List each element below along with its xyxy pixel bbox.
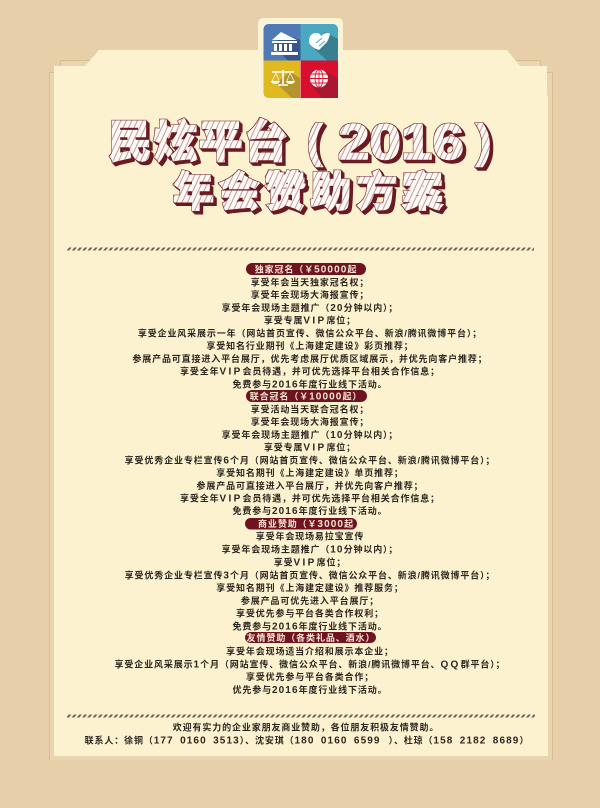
benefits list: 联合冠名: 免费参与2016年度行业线下活动。 (233, 505, 387, 517)
benefits list: 独家冠名: 享受年会当天独家冠名权； (251, 276, 369, 288)
section: 联合冠名 (125, 390, 495, 517)
benefits list: 商业赞助: 参展产品可优先进入平台展厅； (241, 595, 379, 607)
benefits list: 友情赞助: 享受年会现场适当介绍和展示本企业； (226, 646, 394, 658)
paper panel (54, 50, 548, 756)
benefits list: 商业赞助 (125, 530, 495, 632)
benefits list: 独家冠名: 享受企业风采展示一年（网站首页宣传、微信公众平台、新浪/腾讯微博平台）； (138, 328, 482, 340)
badge: 友情赞助: 友情赞助（各类礼品、酒水） (247, 632, 375, 643)
title: 民炫平台（2016）: ) (476, 115, 491, 167)
benefits list: 商业赞助: 享受优秀企业专栏宣传3个月（网站首页宣传、微信公众平台、新浪/腾讯微博平台）； (125, 570, 495, 582)
icon tile: handshake heart (300, 24, 338, 60)
benefits list: 商业赞助: 享受年会现场主题推广（10分钟以内）； (222, 544, 398, 556)
benefits list: 联合冠名: 享受全年VIP会员待遇，并可优先选择平台相关合作信息； (180, 492, 440, 504)
footer: contact information: 欢迎有实力的企业家朋友商业赞助，各位朋友积极友情赞助。 (173, 722, 439, 732)
badge: 联合冠名: 联合冠名（￥10000起） (250, 390, 362, 402)
benefits list: 独家冠名: 享受年会现场大海报宣传； (251, 289, 369, 301)
benefits list: 商业赞助: 免费参与2016年度行业线下活动。 (233, 620, 387, 632)
benefits list: 友情赞助: 优先参与2016年度行业线下活动。 (233, 684, 387, 696)
benefits list: 联合冠名: 享受年会现场主题推广（10分钟以内）； (222, 429, 398, 441)
back paper layers (50, 60, 552, 760)
benefits list: 独家冠名: 享受年会现场主题推广（20分钟以内）； (222, 302, 398, 314)
footer: contact information: 联系人：徐铜（177 0160 3513）、沈安琪（180 0160 6599 ）、杜琼（158 2182 8689） (85, 734, 529, 746)
badge: 商业赞助: 商业赞助（￥3000起 (258, 518, 354, 530)
title: 民炫平台（2016） (108, 114, 491, 170)
benefits list: 联合冠名: 享受专属VIP席位； (264, 442, 356, 454)
benefits list: 友情赞助: 享受优先参与平台各类合作； (246, 671, 374, 683)
benefits list: 联合冠名: 享受年会现场大海报宣传； (251, 416, 369, 428)
title: 民炫平台（2016）: ( (307, 115, 323, 167)
icon tile: globe (300, 60, 338, 98)
badge: 独家冠名: 独家冠名（￥50000起 (255, 264, 357, 276)
logo (258, 18, 343, 102)
benefits list: 独家冠名: 享受知名行业期刊《上海建定建设》彩页推荐； (206, 340, 414, 352)
benefits list: 商业赞助: 享受VIP席位； (274, 556, 346, 568)
section: 友情赞助 (115, 632, 505, 696)
benefits list: 联合冠名: 参展产品可直接进入平台展厅，并优先向客户推荐； (196, 480, 424, 492)
benefits list: 联合冠名: 享受优秀企业专栏宣传6个月（网站首页宣传、微信公众平台、新浪/腾讯微博平台）； (125, 454, 495, 466)
benefits list: 联合冠名: 享受活动当天联合冠名权； (251, 404, 369, 416)
benefits list: 联合冠名 (125, 404, 495, 517)
title: 民炫平台（2016）: 民炫平台 (108, 117, 288, 167)
bottom divider (67, 714, 535, 718)
footer: contact information (85, 722, 529, 746)
icon tile: bank (264, 24, 300, 60)
top divider (67, 248, 534, 250)
benefits list: 独家冠名: 参展产品可直接进入平台展厅，优先考虑展厅优质区域展示，并优先向客户推荐； (132, 353, 488, 365)
icon tile: scales (264, 60, 300, 98)
benefits list: 独家冠名: 免费参与2016年度行业线下活动。 (233, 378, 387, 390)
subtitle: 年会赞助方案: 年会赞助方案 (173, 169, 443, 215)
benefits list: 独家冠名: 享受专属VIP席位； (264, 314, 356, 326)
section: 商业赞助 (125, 518, 495, 632)
benefits list: 商业赞助: 享受知名期刊《上海建定建设》推荐服务； (216, 582, 404, 594)
benefits list: 独家冠名: 享受全年VIP会员待遇，并可优先选择平台相关合作信息； (180, 366, 440, 378)
benefits list: 联合冠名: 享受知名期刊《上海建定建设》单页推荐； (216, 467, 404, 479)
benefits list: 商业赞助: 享受年会现场易拉宝宣传 (256, 530, 364, 542)
title: 民炫平台（2016）: 2016 (338, 114, 464, 170)
benefits list: 友情赞助: 享受企业风采展示1个月（网站宣传、微信公众平台、新浪/腾讯微博平台、QQ群平台）； (115, 658, 505, 670)
section: 独家冠名 (132, 263, 488, 390)
benefits list: 独家冠名 (132, 276, 488, 390)
benefits list: 商业赞助: 享受优先参与平台各类合作权利； (236, 608, 384, 620)
benefits list: 友情赞助 (115, 646, 505, 696)
